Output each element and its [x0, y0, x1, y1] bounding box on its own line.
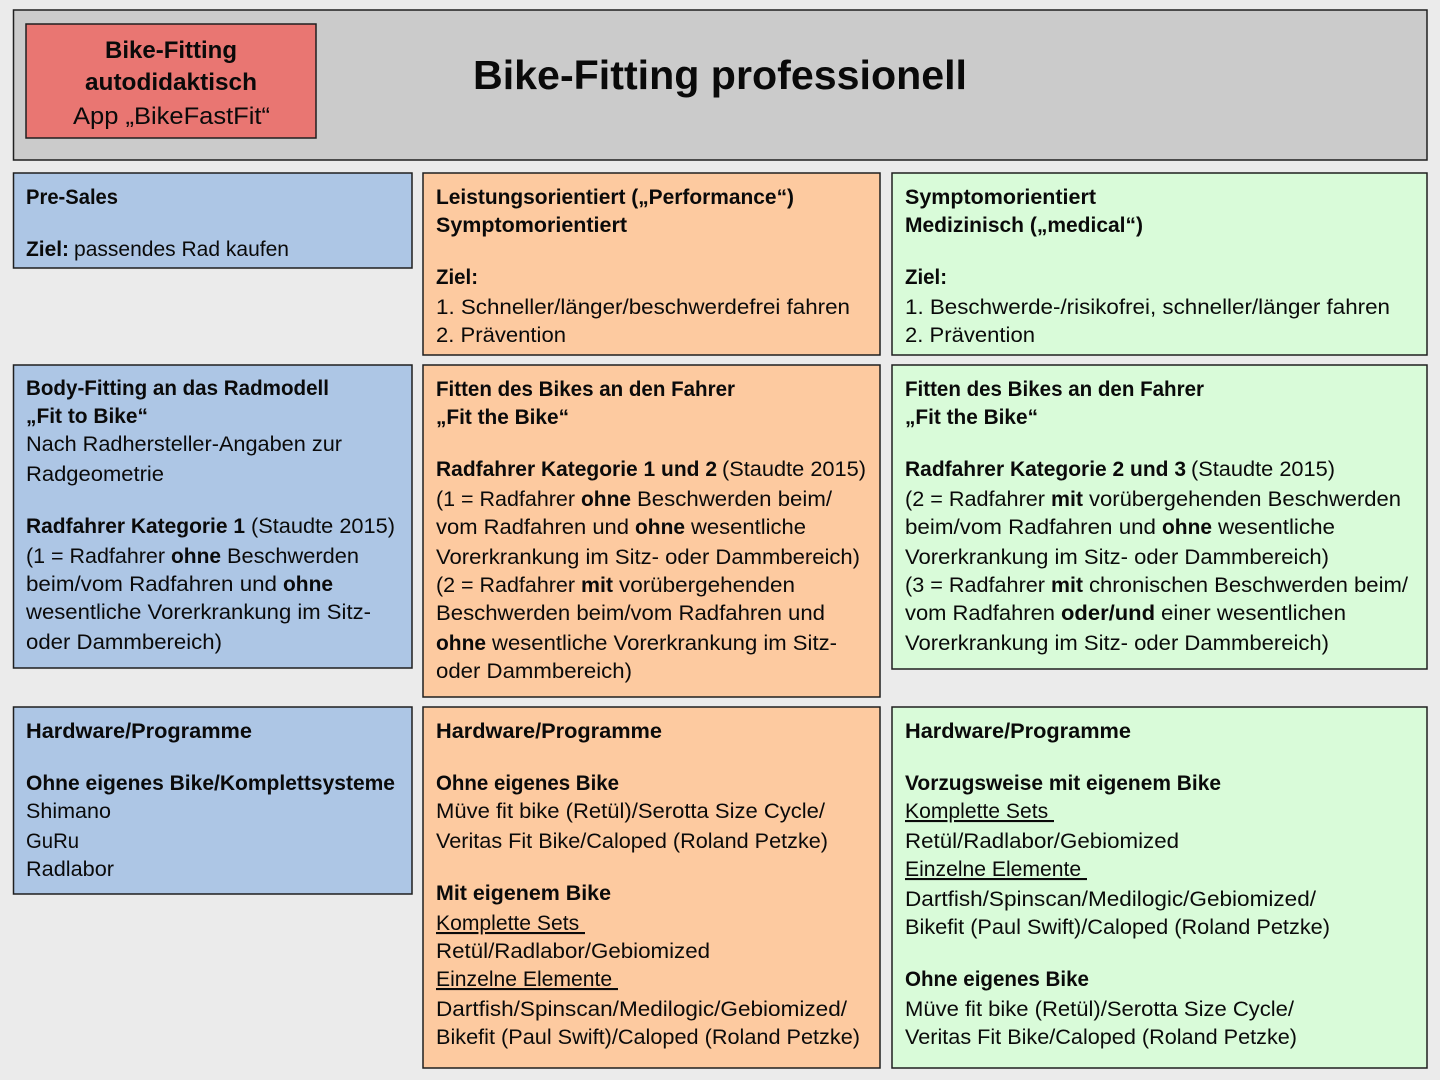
- panel: Fit the Bike performance: [423, 365, 880, 697]
- panel: Body-Fitting: „Fit to Bike“: [26, 405, 148, 428]
- panel: Body-Fitting: Body-Fitting an das Radmodell: [26, 377, 329, 400]
- panel: Hardware medical: Komplette Sets: [905, 800, 1054, 823]
- panel: Fit the Bike performance: mit: [581, 574, 613, 597]
- panel: Fit the Bike medical: Vorerkrankung im Sitz- oder Dammbereich): [905, 546, 1329, 569]
- panel: Fit the Bike performance: oder Dammbereich): [436, 660, 632, 683]
- panel: Body-Fitting: Radfahrer Kategorie 1: [26, 515, 245, 538]
- panel: Fit the Bike medical: vom Radfahren: [905, 602, 1055, 625]
- panel: Fit the Bike performance: vorübergehenden: [619, 574, 795, 597]
- panel: Fit the Bike performance: Fitten des Bikes an den Fahrer: [436, 378, 735, 401]
- panel: Fit the Bike performance: „Fit the Bike“: [436, 406, 569, 429]
- panel: Fit the Bike medical: einer wesentlichen: [1161, 602, 1346, 625]
- panel: Fit the Bike medical: mit: [1051, 488, 1083, 511]
- panel: Hardware performance: Bikefit (Paul Swift)/Caloped (Roland Petzke): [436, 1026, 860, 1049]
- panel: Fit the Bike medical: oder/und: [1061, 602, 1155, 625]
- panel: Hardware medical: Dartfish/Spinscan/Medilogic/Gebiomized/: [905, 888, 1316, 911]
- panel: Hardware pre-sales: Ohne eigenes Bike/Komplettsysteme: [26, 772, 395, 795]
- panel: Body-Fitting: Nach Radhersteller-Angaben zur: [26, 433, 342, 456]
- panel: Symptomorientiert medizinisch: Symptomorientiert: [905, 186, 1096, 209]
- panel: Hardware medical: Müve fit bike (Retül)/Serotta Size Cycle/: [905, 998, 1294, 1021]
- panel: Pre-Sales: Ziel:: [26, 238, 69, 261]
- panel: Fit the Bike performance: ohne: [635, 516, 685, 539]
- panel: Hardware performance: Einzelne Elemente: [436, 968, 618, 991]
- panel: Hardware pre-sales: [14, 707, 412, 894]
- panel: Fit the Bike performance: vom Radfahren und: [436, 516, 629, 539]
- panel: Fit the Bike medical: beim/vom Radfahren und: [905, 516, 1156, 539]
- panel: Hardware performance: Veritas Fit Bike/Caloped (Roland Petzke): [436, 830, 828, 853]
- panel: Hardware medical: Ohne eigenes Bike: [905, 968, 1089, 991]
- panel: Leistungsorientiert: Ziel:: [436, 266, 478, 289]
- panel: Fit the Bike performance: wesentliche Vorerkrankung im Sitz-: [491, 632, 837, 655]
- panel: Hardware medical: Vorzugsweise mit eigenem Bike: [905, 772, 1221, 795]
- panel: Fit the Bike performance: (Staudte 2015): [722, 458, 866, 481]
- panel: Body-Fitting: (Staudte 2015): [251, 515, 395, 538]
- panel: Body-Fitting: (1 = Radfahrer: [26, 545, 165, 568]
- panel: Hardware performance: Müve fit bike (Retül)/Serotta Size Cycle/: [436, 800, 825, 823]
- panel: Leistungsorientiert: 1. Schneller/länger/beschwerdefrei fahren: [436, 296, 850, 319]
- panel: Fit the Bike performance: Beschwerden beim/: [637, 488, 832, 511]
- panel: Fit the Bike performance: ohne: [581, 488, 631, 511]
- panel: Fit the Bike performance: Vorerkrankung im Sitz- oder Dammbereich): [436, 546, 860, 569]
- panel: Fit the Bike medical: (Staudte 2015): [1191, 458, 1335, 481]
- panel: Body-Fitting: wesentliche Vorerkrankung im Sitz-: [25, 601, 371, 624]
- panel: Pre-Sales: Pre-Sales: [26, 186, 118, 209]
- panel: Fit the Bike medical: Vorerkrankung im Sitz- oder Dammbereich): [905, 632, 1329, 655]
- panel: Body-Fitting: ohne: [171, 545, 221, 568]
- panel: Hardware performance: Dartfish/Spinscan/Medilogic/Gebiomized/: [436, 998, 847, 1021]
- panel: Hardware pre-sales: Radlabor: [26, 858, 114, 881]
- panel: Fit the Bike medical: Fitten des Bikes an den Fahrer: [905, 378, 1204, 401]
- panel: Bike-Fitting autodidaktisch: [26, 24, 316, 138]
- panel: Bike-Fitting autodidaktisch: Bike-Fitting: [105, 37, 237, 64]
- panel: Fit the Bike medical: ohne: [1162, 516, 1212, 539]
- panel: Fit the Bike medical: mit: [1051, 574, 1083, 597]
- panel: Symptomorientiert medizinisch: 2. Prävention: [905, 324, 1035, 347]
- panel: Hardware performance: Mit eigenem Bike: [436, 882, 611, 905]
- panel: Hardware medical: Einzelne Elemente: [905, 858, 1087, 881]
- panel: Body-Fitting: [14, 365, 412, 668]
- panel: Leistungsorientiert: 2. Prävention: [436, 324, 566, 347]
- panel: Fit the Bike performance: Beschwerden beim/vom Radfahren und: [436, 602, 825, 625]
- panel: Symptomorientiert medizinisch: [892, 173, 1427, 355]
- panel: Body-Fitting: Beschwerden: [227, 545, 359, 568]
- title: Bike-Fitting professionell: [473, 52, 967, 98]
- panel: Hardware performance: Komplette Sets: [436, 912, 585, 935]
- panel: Fit the Bike medical: [892, 365, 1427, 669]
- panel: Hardware medical: Retül/Radlabor/Gebiomized: [905, 830, 1179, 853]
- panel: Fit the Bike medical: vorübergehenden Beschwerden: [1089, 488, 1401, 511]
- panel: Leistungsorientiert: Symptomorientiert: [436, 214, 627, 237]
- panel: Fit the Bike medical: „Fit the Bike“: [905, 406, 1038, 429]
- panel: Hardware medical: Veritas Fit Bike/Caloped (Roland Petzke): [905, 1026, 1297, 1049]
- panel: Bike-Fitting autodidaktisch: App „BikeFastFit“: [73, 103, 270, 130]
- panel: Symptomorientiert medizinisch: Ziel:: [905, 266, 947, 289]
- panel: Fit the Bike medical: Radfahrer Kategorie 2 und 3: [905, 458, 1186, 481]
- panel: Fit the Bike performance: ohne: [436, 632, 486, 655]
- panel: Hardware performance: Ohne eigenes Bike: [436, 772, 619, 795]
- panel: Hardware medical: Bikefit (Paul Swift)/Caloped (Roland Petzke): [905, 916, 1330, 939]
- panel: Hardware pre-sales: GuRu: [26, 830, 79, 853]
- panel: Hardware performance: Hardware/Programme: [436, 720, 662, 743]
- panel: Fit the Bike medical: (2 = Radfahrer: [905, 488, 1045, 511]
- panel: Fit the Bike performance: (1 = Radfahrer: [436, 488, 575, 511]
- panel: Hardware pre-sales: Hardware/Programme: [26, 720, 252, 743]
- panel: header: [14, 10, 1427, 160]
- panel: Fit the Bike medical: (3 = Radfahrer: [905, 574, 1045, 597]
- panel: Fit the Bike medical: wesentliche: [1217, 516, 1335, 539]
- panel: Leistungsorientiert: [423, 173, 880, 355]
- panel: Pre-Sales: [14, 173, 412, 268]
- panel: Hardware performance: Retül/Radlabor/Gebiomized: [436, 940, 710, 963]
- panel: Bike-Fitting autodidaktisch: autodidaktisch: [85, 69, 257, 96]
- panel: Fit the Bike performance: (2 = Radfahrer: [436, 574, 575, 597]
- panel: Hardware performance: [423, 707, 880, 1068]
- panel: Body-Fitting: oder Dammbereich): [26, 631, 222, 654]
- panel: Body-Fitting: beim/vom Radfahren und: [26, 573, 277, 596]
- panel: Body-Fitting: Radgeometrie: [26, 463, 164, 486]
- panel: Body-Fitting: ohne: [283, 573, 333, 596]
- panel: Fit the Bike medical: chronischen Beschwerden beim/: [1089, 574, 1408, 597]
- panel: Symptomorientiert medizinisch: 1. Beschwerde-/risikofrei, schneller/länger fahren: [905, 296, 1390, 319]
- panel: Hardware medical: [892, 707, 1427, 1068]
- panel: Pre-Sales: passendes Rad kaufen: [74, 238, 289, 261]
- panel: Symptomorientiert medizinisch: Medizinisch („medical“): [905, 214, 1143, 237]
- panel: Leistungsorientiert: Leistungsorientiert („Performance“): [436, 186, 794, 209]
- panel: Hardware medical: Hardware/Programme: [905, 720, 1131, 743]
- panel: Hardware pre-sales: Shimano: [26, 800, 111, 823]
- panel: Fit the Bike performance: wesentliche: [690, 516, 806, 539]
- panel: Fit the Bike performance: Radfahrer Kategorie 1 und 2: [436, 458, 717, 481]
